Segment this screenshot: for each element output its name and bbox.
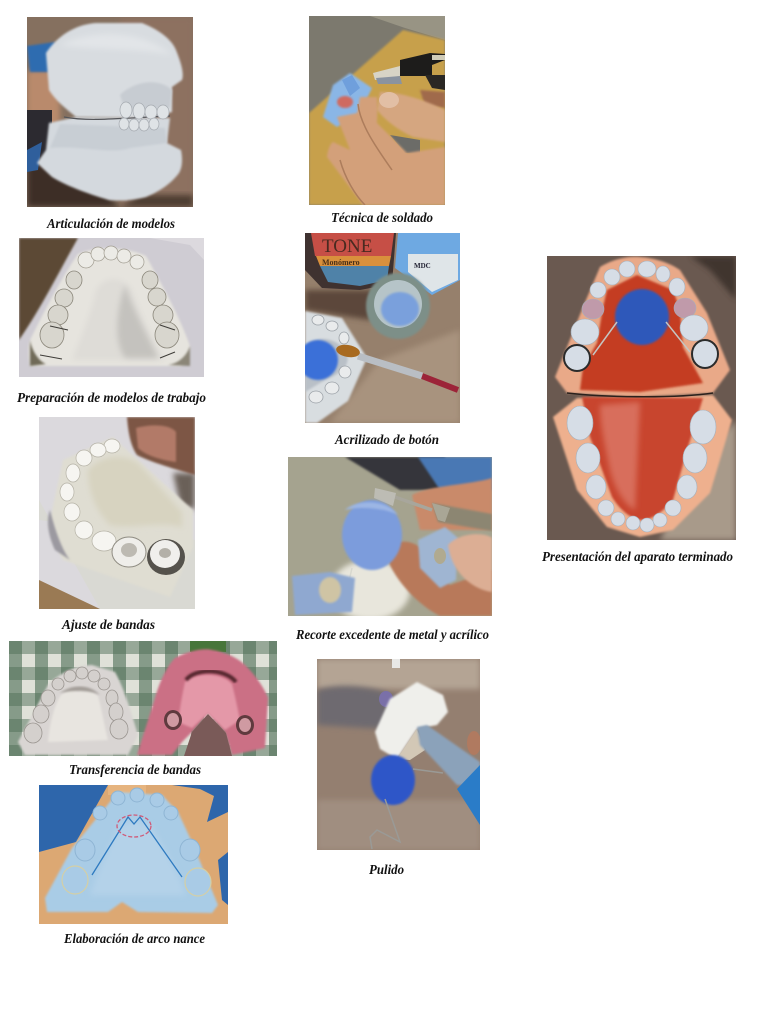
caption: transferencia: Transferencia de bandas	[69, 763, 202, 778]
photo: ajuste de bandas	[39, 417, 195, 609]
photo: articulación de modelos	[27, 17, 193, 207]
caption: recorte: Recorte excedente de metal y acrílico	[295, 628, 489, 643]
caption: presentación: Presentación del aparato terminado	[542, 550, 733, 565]
photo: acrilizado de botón: MDC	[414, 262, 431, 270]
caption: preparación: Preparación de modelos de trabajo	[17, 391, 206, 406]
photo: acrilizado de botón: TONE	[322, 236, 372, 257]
photo: técnica de soldado	[309, 16, 445, 205]
photo: transferencia de bandas	[9, 640, 277, 756]
photo: elaboración de arco nance	[39, 785, 228, 924]
photo: presentación del aparato terminado	[547, 256, 736, 540]
photo: acrilizado de botón: Monómero	[322, 258, 360, 267]
caption: acrilizado: Acrilizado de botón	[334, 433, 439, 448]
caption: técnica: Técnica de soldado	[331, 211, 433, 226]
photo: preparación de modelos de trabajo	[19, 238, 204, 377]
photo: pulido	[317, 659, 481, 850]
caption: articulación: Articulación de modelos	[46, 217, 176, 232]
caption: ajuste: Ajuste de bandas	[61, 618, 156, 633]
caption: elaboración: Elaboración de arco nance	[63, 932, 205, 947]
caption: pulido: Pulido	[369, 863, 404, 878]
photo: acrilizado de botón	[298, 233, 460, 423]
photo: recorte excedente de metal y acrílico	[288, 457, 492, 620]
